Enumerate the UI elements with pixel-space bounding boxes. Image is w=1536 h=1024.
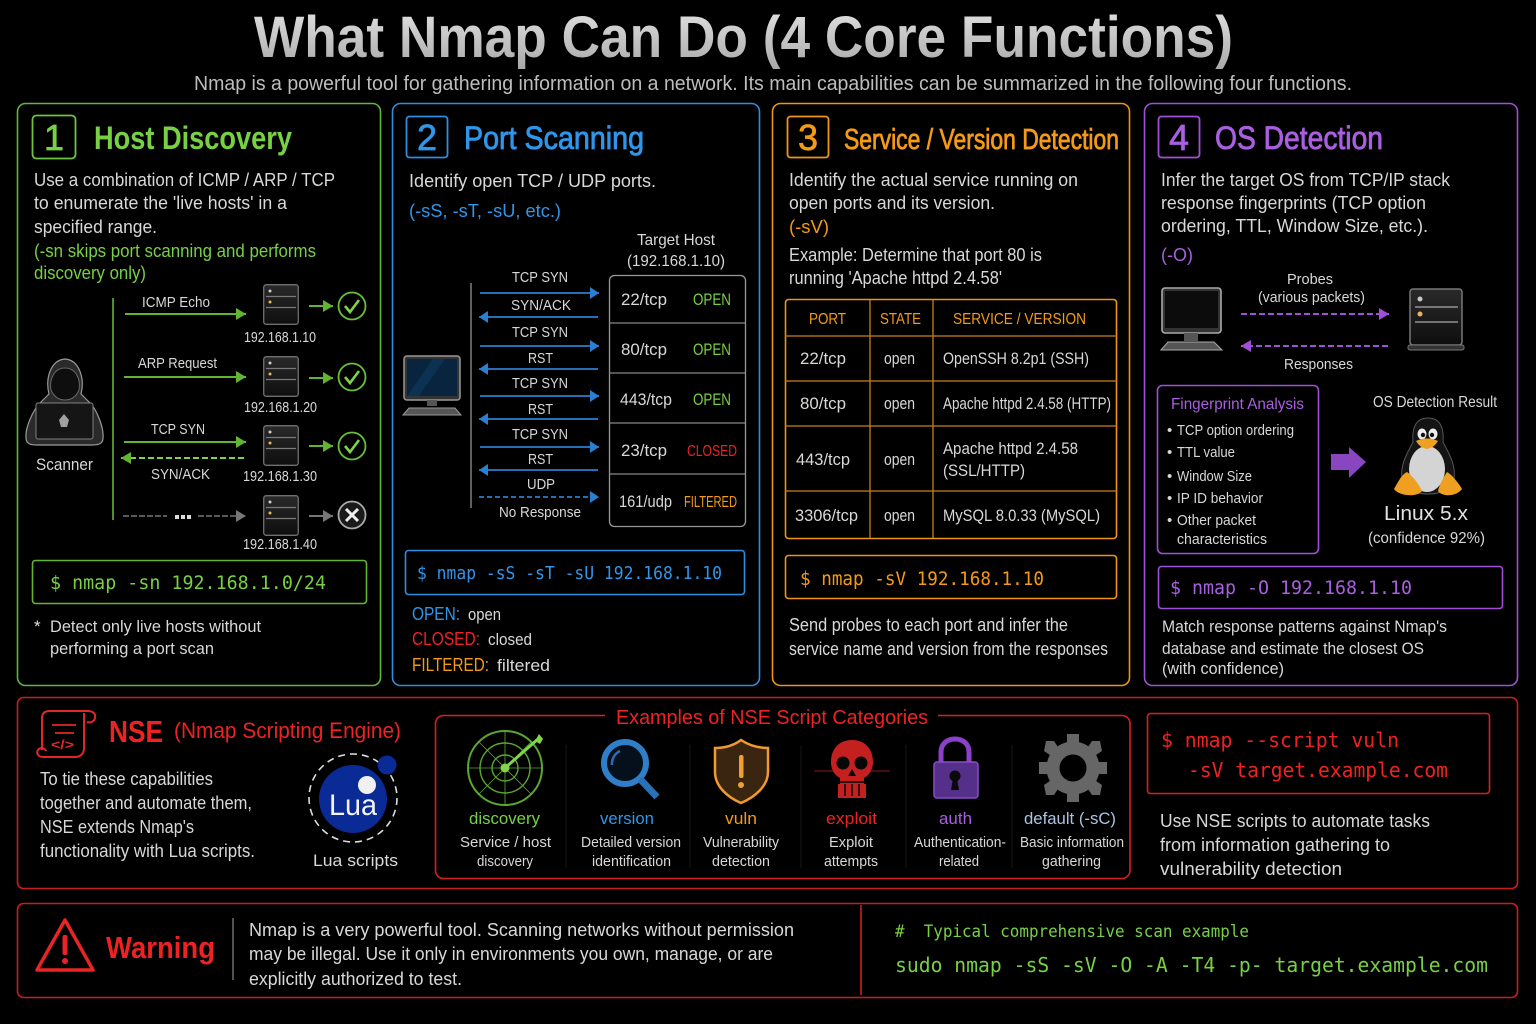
number badge 2: 2 (417, 117, 437, 158)
description: functionality with Lua scripts. (40, 841, 255, 861)
fingerprint analysis box: TTL value (1177, 444, 1235, 461)
description: specified range. (34, 216, 157, 237)
state legend (412, 604, 550, 675)
category: vuln: Vulnerability (703, 834, 779, 851)
footnote (34, 617, 261, 658)
service table: Apache httpd 2.4.58 (943, 439, 1078, 458)
target label: (192.168.1.10) (627, 253, 725, 270)
service table: open (884, 394, 915, 413)
category: discovery: Service / host (460, 834, 552, 851)
category: vuln: detection (712, 853, 770, 870)
packet exchange arrows: UDP (527, 476, 555, 493)
category: auth (914, 739, 1006, 870)
arrow: responses (1241, 345, 1388, 347)
category: version: identification (592, 853, 671, 870)
NSE note: vulnerability detection (1160, 859, 1342, 879)
description: To tie these capabilities (40, 769, 213, 789)
description: Identify open TCP / UDP ports. (409, 170, 656, 191)
fingerprint analysis box: Other packet (1177, 512, 1257, 529)
NSE note: Use NSE scripts to automate tasks (1160, 811, 1430, 831)
probes label: Probes (1287, 271, 1333, 288)
panel: service version detection (772, 104, 1130, 686)
description: Use a combination of ICMP / ARP / TCP (34, 169, 335, 190)
fingerprint analysis box: characteristics (1177, 531, 1267, 548)
row: no response (123, 496, 366, 553)
category: exploit: attempts (824, 853, 878, 870)
icon: script scroll: </> (51, 737, 74, 752)
packet exchange arrows: TCP SYN (512, 375, 568, 392)
fingerprint analysis box: Window Size (1177, 468, 1252, 485)
command box (32, 560, 366, 604)
arrow: to result (1331, 447, 1366, 478)
NSE note (1160, 811, 1430, 879)
icon: computer (1161, 288, 1222, 350)
category: discovery: discovery (469, 809, 540, 828)
row: ARP Request (124, 355, 366, 416)
categories title: Examples of NSE Script Categories (616, 707, 928, 729)
result: Linux 5.x: Linux 5.x (1384, 503, 1468, 525)
footnote: * (34, 617, 41, 636)
footnote: (with confidence) (1162, 659, 1284, 678)
category: default: Basic information (1020, 834, 1124, 851)
icon: script scroll (37, 711, 95, 757)
description: Identify the actual service running on (789, 169, 1078, 190)
heading: OS Detection: OS Detection (1215, 120, 1383, 156)
warning text: explicitly authorized to test. (249, 969, 462, 989)
category: auth: related (939, 853, 979, 870)
command box: $ nmap -O 192.168.1.10 (1170, 577, 1412, 599)
number badge 4: 4 (1169, 117, 1189, 158)
row: ICMP Echo: ICMP Echo (142, 294, 210, 311)
flag: (-O) (1161, 245, 1193, 265)
command box: $ nmap -sS -sT -sU 192.168.1.10 (417, 564, 722, 584)
footnote (789, 615, 1108, 659)
icon: computer (403, 356, 461, 415)
heading: Nmap Scripting Engine: (Nmap Scripting Engine) (174, 718, 401, 743)
service table: PORT (809, 311, 846, 328)
service table: STATE (880, 311, 921, 328)
description: open ports and its version. (789, 192, 995, 213)
note: -sn: discovery only) (34, 263, 146, 283)
category: discovery (460, 731, 552, 870)
warning text: may be illegal. Use it only in environments you own, manage, or are (249, 944, 773, 964)
service table: (SSL/HTTP) (943, 461, 1025, 480)
fingerprint analysis box: • (1167, 468, 1172, 485)
label: Lua scripts: Lua scripts (313, 851, 398, 870)
icon: Linux penguin (1394, 418, 1462, 495)
category: vuln: vuln (725, 809, 757, 828)
port state table: 23/tcp (621, 441, 667, 460)
panel: warning (18, 904, 1518, 998)
footnote: performing a port scan (50, 639, 214, 658)
panel: NSE (18, 698, 1518, 888)
note: -sn (34, 241, 316, 283)
note: -sn: (-sn skips port scanning and performs (34, 241, 316, 261)
heading: Host Discovery: Host Discovery (94, 120, 292, 156)
heading: Service / Version Detection: Service / Version Detection (844, 124, 1119, 156)
category: auth: auth (939, 809, 972, 828)
port state table: CLOSED (687, 443, 737, 460)
footnote: database and estimate the closest OS (1162, 639, 1424, 658)
category: default: gathering (1042, 853, 1101, 870)
category: discovery: discovery (477, 853, 533, 870)
service table: SERVICE / VERSION (953, 311, 1086, 328)
row: ARP Request: 192.168.1.20 (244, 399, 317, 416)
result label: OS Detection Result (1373, 394, 1497, 411)
category: vuln (703, 740, 779, 870)
number badge 2 (406, 116, 448, 158)
title: What Nmap Can Do (4 Core Functions) (254, 5, 1233, 70)
row: ARP Request: ARP Request (138, 355, 218, 372)
category: version (581, 742, 681, 870)
packet exchange arrows: RST (528, 451, 553, 468)
example text: Example: Determine that port 80 is (789, 245, 1042, 265)
flags: (-sS, -sT, -sU, etc.) (409, 201, 561, 221)
description: to enumerate the 'live hosts' in a (34, 192, 288, 213)
state legend: open (468, 605, 501, 624)
row: TCP SYN: TCP SYN (151, 421, 205, 438)
command box (786, 556, 1116, 598)
command box (1158, 566, 1502, 608)
box: NSE script categories (436, 707, 1130, 878)
NSE command box (1148, 714, 1490, 794)
footnote: Send probes to each port and infer the (789, 615, 1068, 635)
footnote: service name and version from the responses (789, 639, 1108, 659)
warning text: Nmap is a very powerful tool. Scanning networks without permission (249, 920, 794, 940)
command box (406, 550, 744, 594)
packet exchange arrows: RST (528, 401, 553, 418)
category: exploit (814, 740, 890, 870)
NSE note: from information gathering to (1160, 835, 1390, 855)
category: auth: Authentication- (914, 834, 1006, 851)
category: default (1020, 734, 1124, 870)
category: exploit: exploit (826, 809, 877, 828)
category: exploit: Exploit (829, 834, 874, 851)
panel: OS detection (1144, 104, 1518, 686)
category: version: version (600, 809, 654, 828)
comprehensive scan example: sudo nmap -sS -sV -O -A -T4 -p- target.example.com (895, 953, 1488, 977)
packet exchange arrows: TCP SYN (512, 269, 568, 286)
packet exchange arrows: No Response (499, 504, 581, 521)
row: no response: 192.168.1.40 (243, 536, 317, 553)
command box: $ nmap -sn 192.168.1.0/24 (50, 572, 326, 594)
comprehensive scan example: # Typical comprehensive scan example (895, 922, 1249, 942)
number badge 3 (788, 116, 828, 158)
service table: 443/tcp (796, 450, 850, 469)
service table: 3306/tcp (795, 506, 858, 525)
description (40, 769, 255, 861)
heading: Warning: Warning (106, 930, 215, 965)
description: NSE extends Nmap's (40, 817, 194, 837)
heading: NSE: NSE (109, 714, 163, 749)
category: version: Detailed version (581, 834, 681, 851)
service table: 22/tcp (800, 349, 846, 368)
responses label: Responses (1284, 356, 1353, 373)
target label: Target Host (637, 232, 716, 249)
fingerprint analysis box: • (1167, 422, 1172, 439)
NSE command box: $ nmap --script vuln (1161, 728, 1399, 752)
row: ICMP Echo (125, 285, 366, 346)
description (34, 169, 335, 237)
port state table: OPEN (693, 390, 731, 409)
fingerprint analysis box: Fingerprint Analysis (1171, 396, 1304, 413)
port state table: FILTERED (684, 494, 737, 511)
state legend: CLOSED: (412, 629, 480, 649)
port state table: OPEN (693, 340, 731, 359)
state legend: OPEN: (412, 604, 460, 624)
icon: hooded scanner (26, 359, 103, 474)
packet exchange arrows (479, 269, 599, 521)
row: TCP SYN: 192.168.1.30 (243, 468, 317, 485)
row: ICMP Echo: 192.168.1.10 (244, 329, 316, 346)
packet exchange arrows: TCP SYN (512, 426, 568, 443)
description: Infer the target OS from TCP/IP stack (1161, 169, 1451, 190)
confidence: (confidence 92%) (1368, 530, 1485, 547)
packet exchange arrows: TCP SYN (512, 324, 568, 341)
icon: Lua logo: Lua (329, 789, 377, 822)
arrow: probes (1241, 313, 1389, 315)
description: together and automate them, (40, 793, 252, 813)
service table: open (884, 506, 915, 525)
fingerprint analysis box: • (1167, 444, 1172, 461)
port state table: OPEN (693, 290, 731, 309)
service table: open (884, 450, 915, 469)
icon: server (1408, 289, 1464, 350)
footnote (1162, 617, 1447, 678)
state legend: filtered (497, 656, 550, 675)
description: ordering, TTL, Window Size, etc.). (1161, 215, 1428, 236)
service table: 80/tcp (800, 394, 846, 413)
service table (785, 300, 1117, 538)
packet exchange arrows: RST (528, 350, 553, 367)
port state table: 161/udp (619, 492, 672, 511)
row: TCP SYN (121, 421, 366, 485)
description: response fingerprints (TCP option (1161, 192, 1426, 213)
category: default: default (-sC) (1024, 809, 1116, 828)
footnote: Detect only live hosts without (50, 617, 261, 636)
description (789, 169, 1078, 213)
number badge 3: 3 (798, 117, 818, 158)
service table: Apache httpd 2.4.58 (HTTP) (943, 394, 1111, 413)
number badge 1 (32, 116, 76, 158)
service table: open (884, 349, 915, 368)
port state table: 443/tcp (620, 390, 672, 409)
state legend: closed (488, 630, 532, 649)
port state table (609, 276, 746, 526)
state legend: FILTERED: (412, 655, 489, 675)
NSE command box: -sV target.example.com (1188, 758, 1448, 782)
panel: port scanning (392, 104, 760, 686)
flag: (-sV) (789, 217, 829, 237)
target label (627, 232, 725, 270)
icon: warning triangle (37, 920, 93, 970)
number badge 1: 1 (44, 117, 64, 158)
comprehensive scan example (895, 922, 1488, 977)
icon: Lua logo (309, 754, 397, 842)
example text (789, 245, 1042, 288)
service table: MySQL 8.0.33 (MySQL) (943, 506, 1100, 525)
panel: host discovery (18, 104, 380, 686)
fingerprint analysis box: • (1167, 490, 1172, 507)
fingerprint analysis box (1158, 386, 1318, 554)
probes label (1258, 271, 1365, 306)
warning text (249, 920, 794, 989)
fingerprint analysis box: • (1167, 512, 1172, 529)
heading: Port Scanning: Port Scanning (464, 120, 644, 156)
example text: running 'Apache httpd 2.4.58' (789, 268, 1002, 288)
footnote: Match response patterns against Nmap's (1162, 617, 1447, 636)
service table: OpenSSH 8.2p1 (SSH) (943, 349, 1089, 368)
fingerprint analysis box: TCP option ordering (1177, 422, 1294, 439)
row: TCP SYN: SYN/ACK (151, 466, 210, 483)
port state table: 22/tcp (621, 290, 667, 309)
fingerprint analysis box: IP ID behavior (1177, 490, 1263, 507)
label: Scanner: Scanner (36, 455, 93, 474)
packet exchange arrows: SYN/ACK (511, 297, 571, 314)
probes label: (various packets) (1258, 289, 1365, 306)
description (1161, 169, 1451, 236)
number badge 4 (1158, 116, 1200, 158)
port state table: 80/tcp (621, 340, 667, 359)
command box: $ nmap -sV 192.168.1.10 (800, 569, 1044, 590)
subtitle: Nmap is a powerful tool for gathering information on a network. Its main capabilities can be summarized in the following four functions. (194, 72, 1352, 95)
